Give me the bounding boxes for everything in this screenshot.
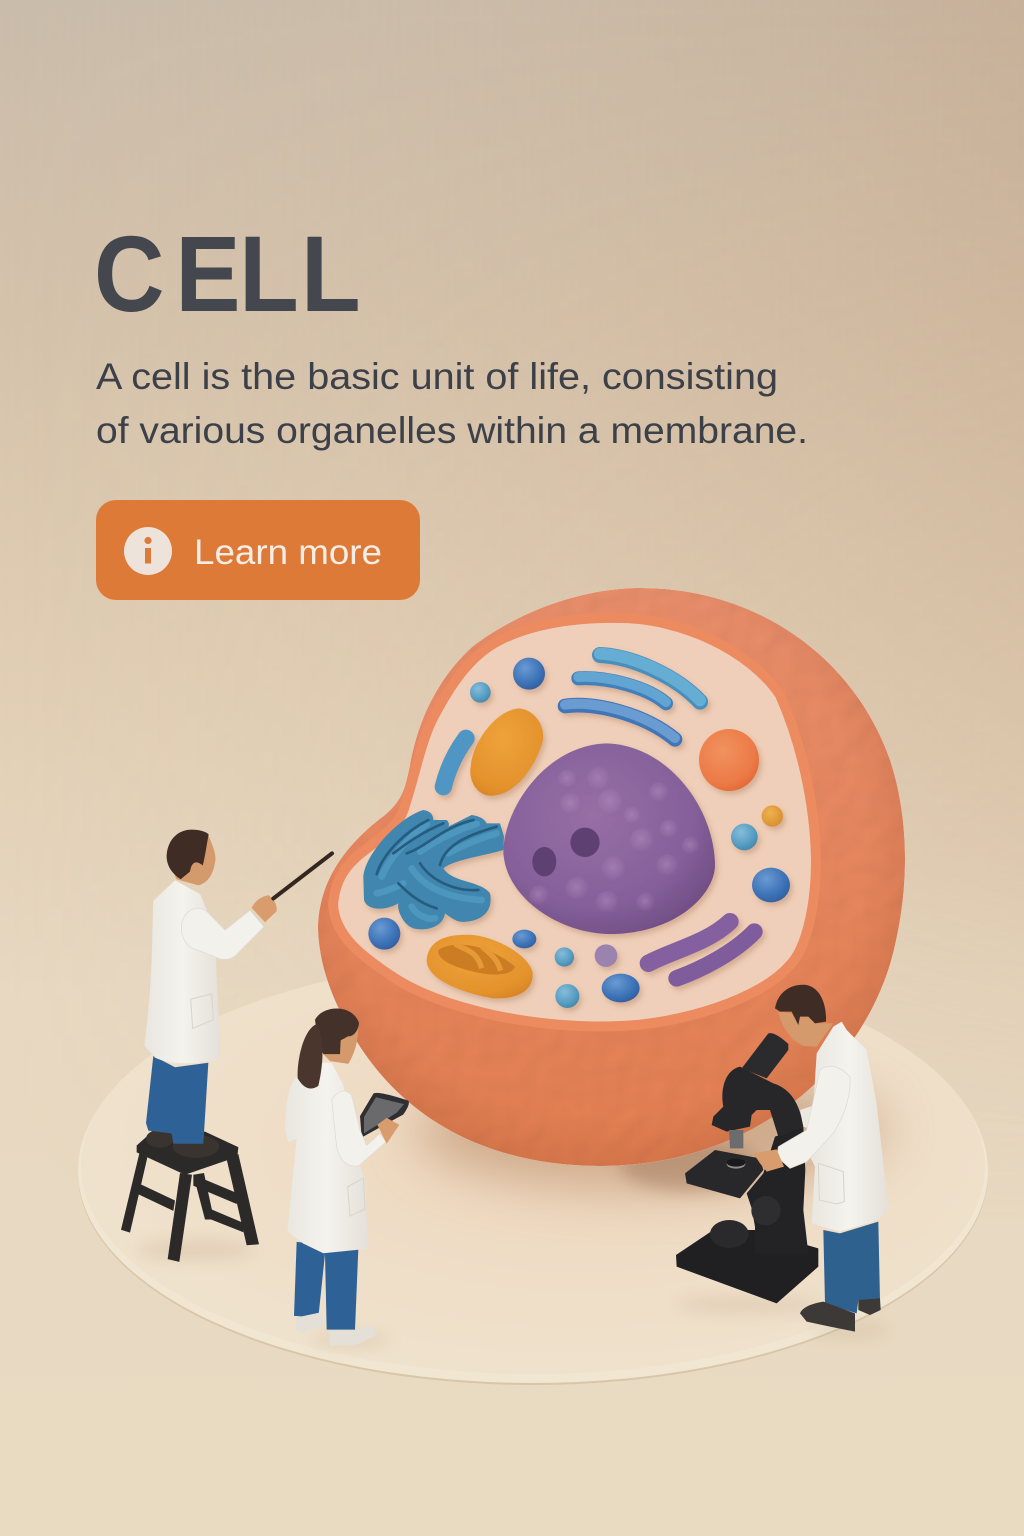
coat pocket [191, 994, 213, 1028]
arm [777, 1066, 850, 1168]
objective lens [729, 1130, 743, 1148]
figure ground shadows [135, 1240, 890, 1347]
hair [167, 830, 209, 879]
cut face with cytoplasm [333, 618, 816, 1027]
description text [96, 356, 808, 451]
ponytail [298, 1024, 322, 1089]
coat pocket [348, 1178, 365, 1216]
blue rod [443, 738, 466, 787]
head [172, 835, 215, 885]
scientist at microscope [676, 985, 888, 1332]
pointer [273, 853, 332, 899]
eyepiece [742, 1033, 788, 1078]
cell model [318, 588, 905, 1166]
orange oval organelle [470, 708, 543, 796]
description text: of various organelles within a membrane. [96, 410, 808, 451]
trousers [146, 1056, 208, 1144]
platform disc [78, 958, 988, 1385]
lab coat [144, 880, 220, 1063]
vesicles and small organelles [368, 658, 790, 1008]
stage [685, 1150, 763, 1198]
purple rods [648, 922, 754, 978]
shoes [146, 1130, 219, 1158]
hair bun [315, 1009, 359, 1054]
lab coat [810, 1022, 888, 1232]
golgi stacks [565, 654, 700, 739]
nucleoli [532, 828, 600, 876]
stool [121, 1132, 259, 1262]
shoes [800, 1298, 881, 1332]
organelles, drawn in 3x coordinates [363, 654, 790, 1008]
raised arm [181, 908, 264, 959]
face [778, 1012, 833, 1047]
button: learn more [96, 500, 420, 600]
hand [377, 1118, 399, 1144]
hair [775, 985, 826, 1025]
lab coat [285, 1063, 368, 1253]
face [323, 1027, 358, 1064]
arm [332, 1091, 386, 1166]
icon: info [124, 527, 172, 575]
trousers [823, 1222, 880, 1313]
mitochondrion [427, 935, 533, 998]
base [676, 1230, 818, 1303]
coat pocket [818, 1163, 844, 1204]
scientist with tablet [285, 1009, 409, 1346]
button: learn more: Learn more [194, 533, 382, 572]
endoplasmic reticulum [363, 810, 504, 929]
pillar [747, 1127, 808, 1253]
tablet [360, 1093, 409, 1138]
shoes [296, 1312, 377, 1346]
title: CELL [94, 213, 361, 334]
orange sphere [699, 729, 759, 791]
focus knob [751, 1196, 781, 1225]
membrane shading [318, 588, 905, 1166]
cell shadow [415, 1072, 885, 1191]
scientist with pointer on stool [121, 830, 332, 1262]
trousers [294, 1242, 358, 1330]
cell outer membrane [318, 588, 905, 1166]
lamp disk [710, 1220, 749, 1248]
microscope [676, 1033, 818, 1303]
hand [252, 895, 277, 922]
arm and head [712, 1067, 803, 1137]
nucleus [503, 743, 715, 934]
inner arm [800, 1105, 815, 1130]
description text: A cell is the basic unit of life, consisting [96, 356, 778, 397]
hand [753, 1149, 784, 1172]
